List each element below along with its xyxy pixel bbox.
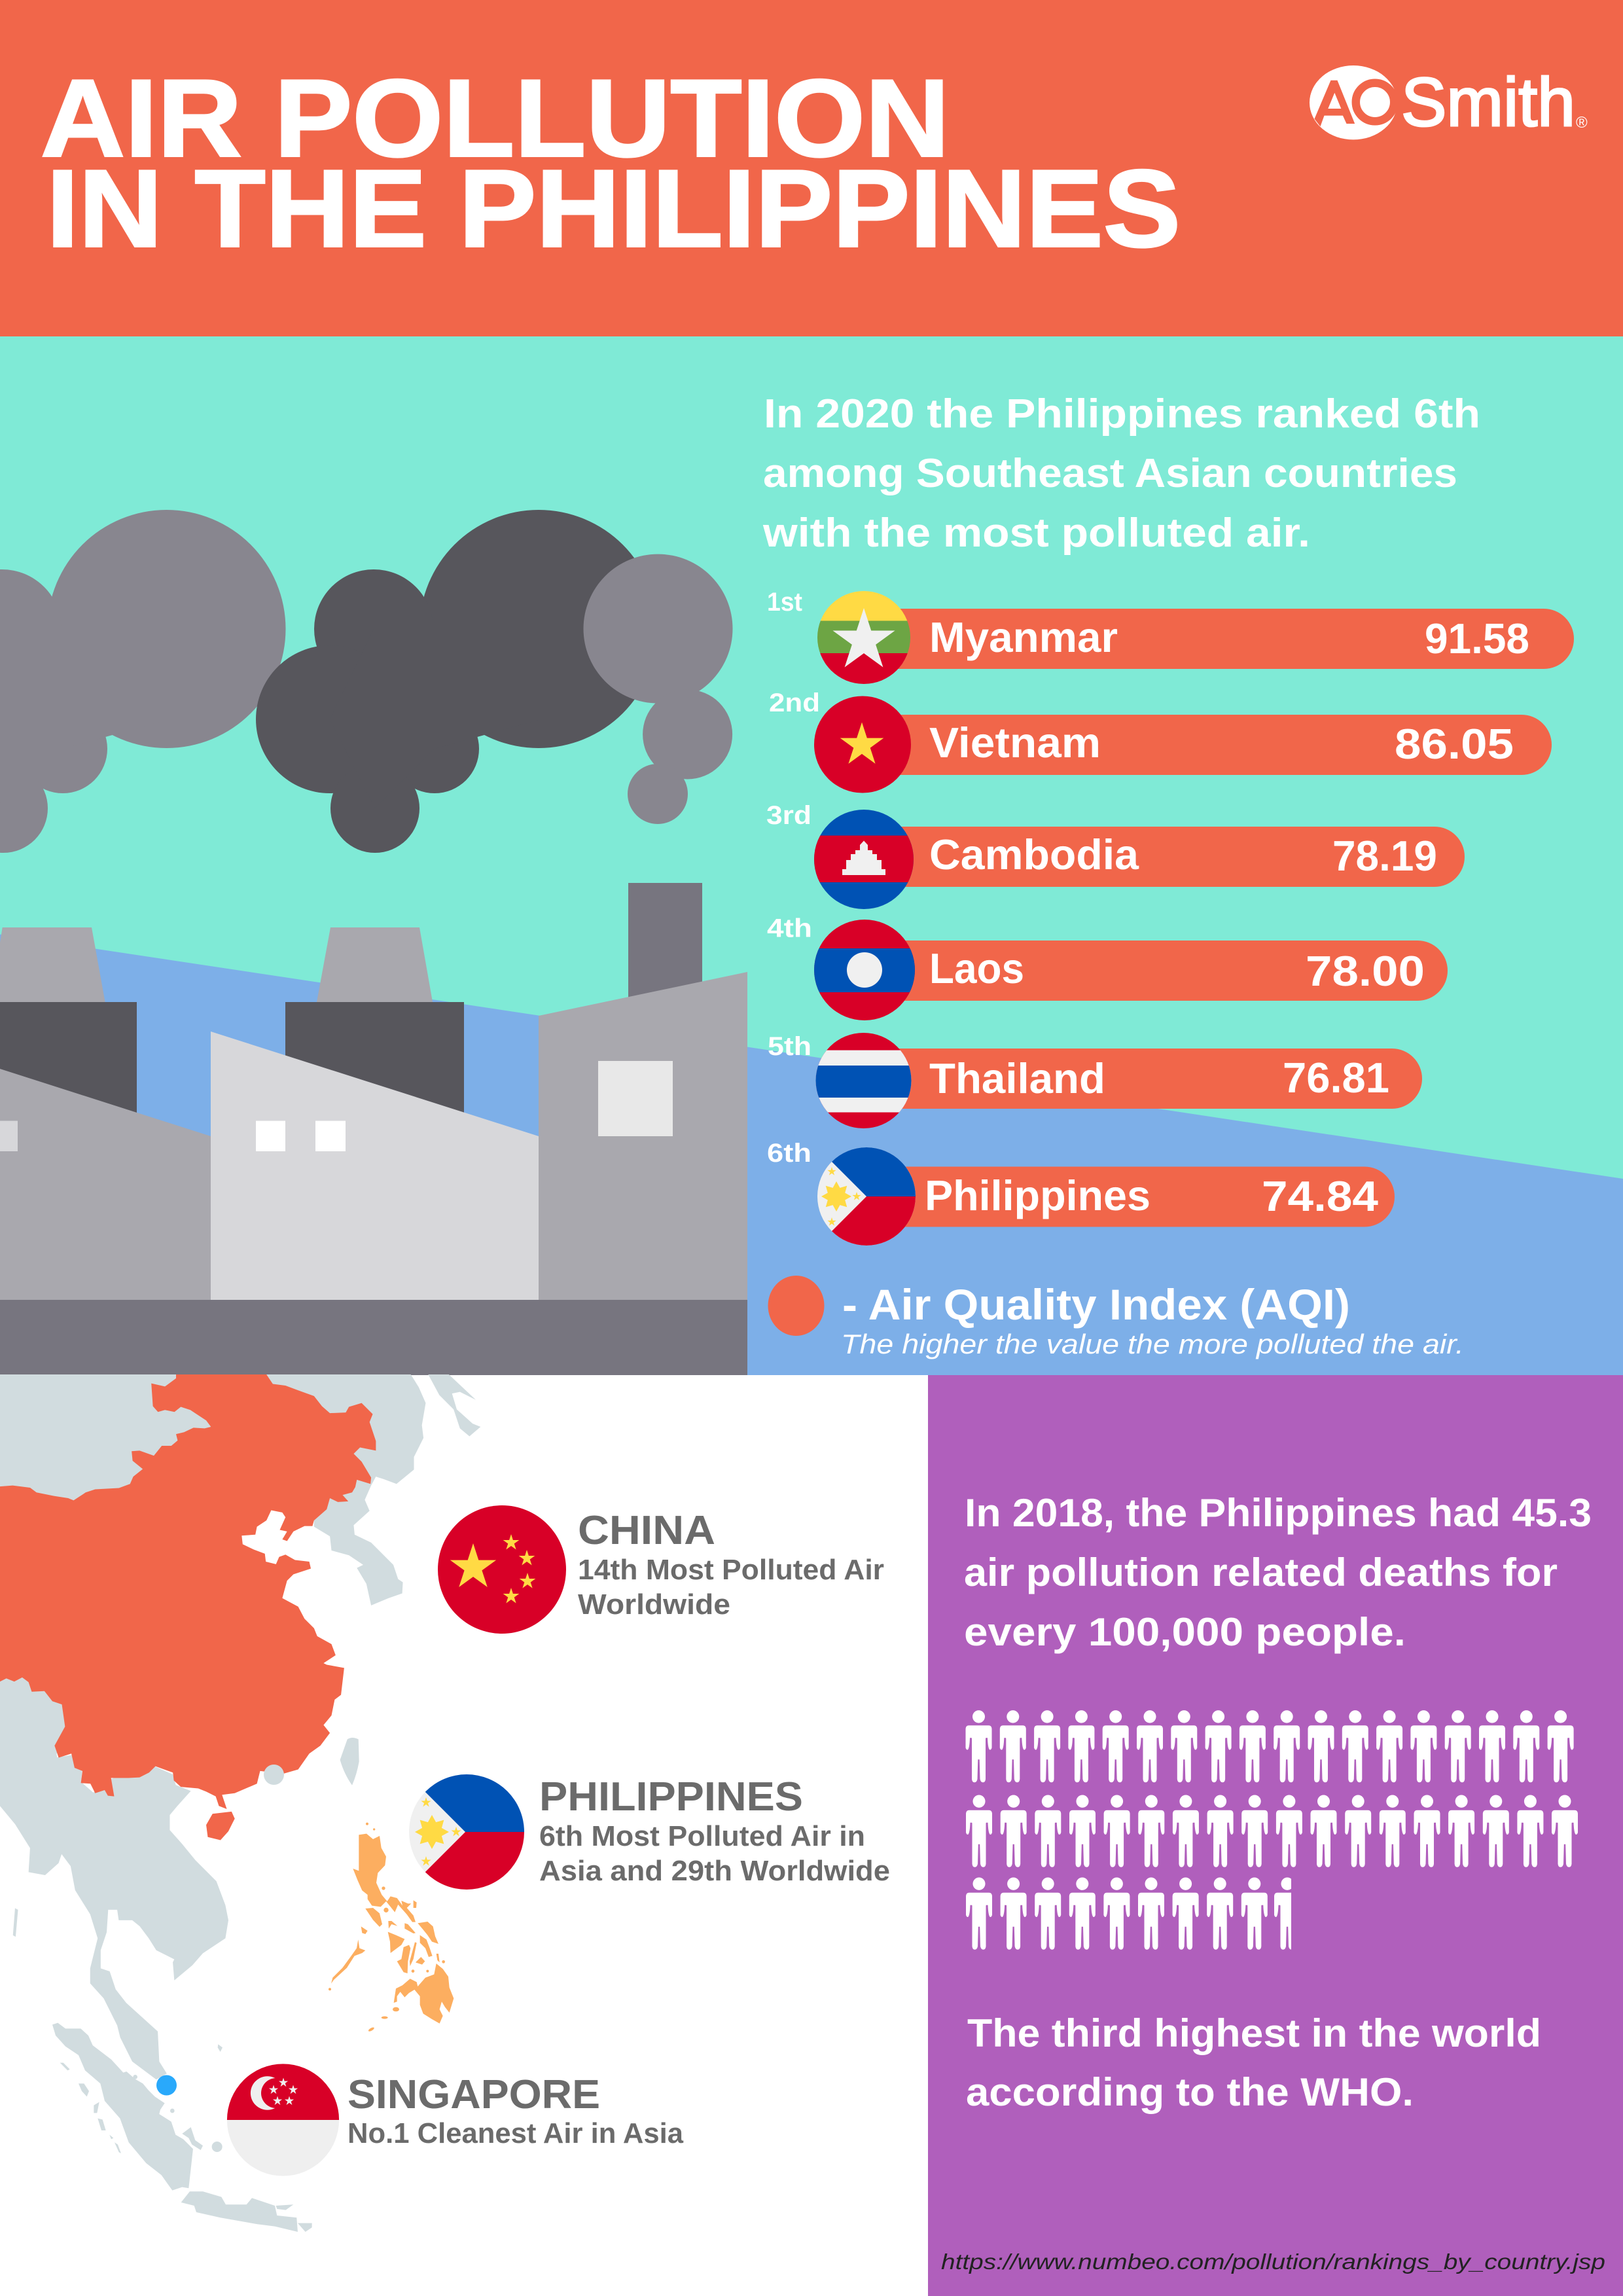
row: Cambodia: 78.19	[1332, 832, 1437, 880]
row: Philippines	[768, 1143, 1395, 1246]
title: AIR POLLUTION	[41, 56, 950, 179]
statistic text: air pollution related deaths for	[964, 1551, 1558, 1594]
map: China highlighted	[0, 1374, 376, 1840]
row: Cambodia: 3rd	[766, 801, 812, 830]
icon: Philippines flag	[409, 1774, 524, 1890]
row: Thailand: 5th	[768, 1032, 812, 1061]
legend: air quality index: - Air Quality Index (AQI)	[842, 1280, 1350, 1329]
row: Myanmar: 91.58	[1425, 615, 1529, 662]
factory illustration	[0, 883, 747, 1375]
source url: https://www.numbeo.com/pollution/rankings_by_country.jsp	[941, 2250, 1605, 2274]
icon: Singapore flag	[226, 2064, 339, 2176]
map marker: Hong Kong	[264, 1765, 284, 1785]
header band	[0, 0, 1623, 336]
row: Vietnam: Vietnam	[929, 719, 1101, 766]
callout: China: CHINA	[578, 1508, 715, 1553]
row: Laos: Laos	[929, 944, 1024, 992]
intro text: among Southeast Asian countries	[763, 451, 1457, 496]
row: Laos: 78.00	[1306, 947, 1425, 995]
row: Vietnam	[769, 689, 1552, 798]
callout: Philippines	[409, 1774, 889, 1890]
ranking bar chart	[766, 588, 1574, 1254]
row: Thailand: 76.81	[1283, 1054, 1389, 1102]
row: Philippines: Philippines	[925, 1172, 1150, 1219]
callout: Singapore: No.1 Cleanest Air in Asia	[348, 2117, 684, 2149]
panel: teal background with blue diagonal	[0, 336, 1623, 1375]
callout: Singapore: SINGAPORE	[348, 2072, 600, 2117]
statistic text: In 2018, the Philippines had 45.3	[965, 1491, 1592, 1535]
map: grey neighbouring countries	[0, 1374, 480, 2232]
panel: deaths statistic	[928, 1375, 1623, 2296]
callout: China: 14th Most Polluted Air	[578, 1554, 884, 1586]
map panel	[0, 1374, 889, 2232]
callout: Philippines: Asia and 29th Worldwide	[539, 1855, 890, 1887]
logo: A.O. Smith: ®	[1576, 114, 1588, 132]
intro text: with the most polluted air.	[762, 511, 1310, 556]
callout: China	[438, 1505, 884, 1634]
row: Laos	[767, 914, 1448, 1028]
row: Cambodia	[766, 801, 1465, 916]
statistic text	[964, 1491, 1592, 1654]
row: Vietnam: 2nd	[769, 689, 820, 717]
intro text	[762, 391, 1480, 556]
logo: A.O. Smith: Smith	[1401, 64, 1575, 141]
row: Cambodia: Cambodia	[929, 831, 1139, 878]
smoke clouds	[0, 510, 733, 853]
ranking text	[966, 2011, 1541, 2114]
row: Laos: 4th	[767, 914, 812, 942]
callout: Philippines: PHILIPPINES	[539, 1774, 803, 1820]
row: Myanmar: Myanmar	[929, 613, 1118, 661]
row: Myanmar: 1st	[767, 588, 802, 617]
row: Philippines: 6th	[767, 1139, 812, 1168]
map marker: Singapore dot	[156, 2075, 177, 2096]
row: Myanmar	[767, 588, 1574, 686]
callout: Singapore	[223, 2062, 684, 2178]
map: Philippines highlighted	[329, 1823, 454, 2032]
title	[41, 56, 1181, 270]
legend: air quality index: The higher the value the more polluted the air.	[841, 1329, 1464, 1359]
row: Philippines: 74.84	[1262, 1172, 1378, 1220]
pictogram: 45.3 people	[966, 1710, 1578, 1950]
row: Vietnam: 86.05	[1395, 720, 1514, 768]
ranking text: The third highest in the world	[967, 2011, 1541, 2055]
row: Thailand: Thailand	[929, 1054, 1105, 1102]
statistic text: every 100,000 people.	[964, 1610, 1406, 1654]
callout: Philippines: 6th Most Polluted Air in	[539, 1820, 865, 1852]
legend: air quality index	[768, 1276, 1464, 1359]
logo: A.O. Smith	[1310, 64, 1588, 141]
ranking text: according to the WHO.	[966, 2070, 1414, 2114]
row: Thailand	[768, 1033, 1422, 1128]
icon: China flag	[438, 1505, 566, 1634]
intro text: In 2020 the Philippines ranked 6th	[764, 391, 1480, 437]
title: IN THE PHILIPPINES	[46, 147, 1181, 270]
callout: China: Worldwide	[578, 1588, 730, 1621]
